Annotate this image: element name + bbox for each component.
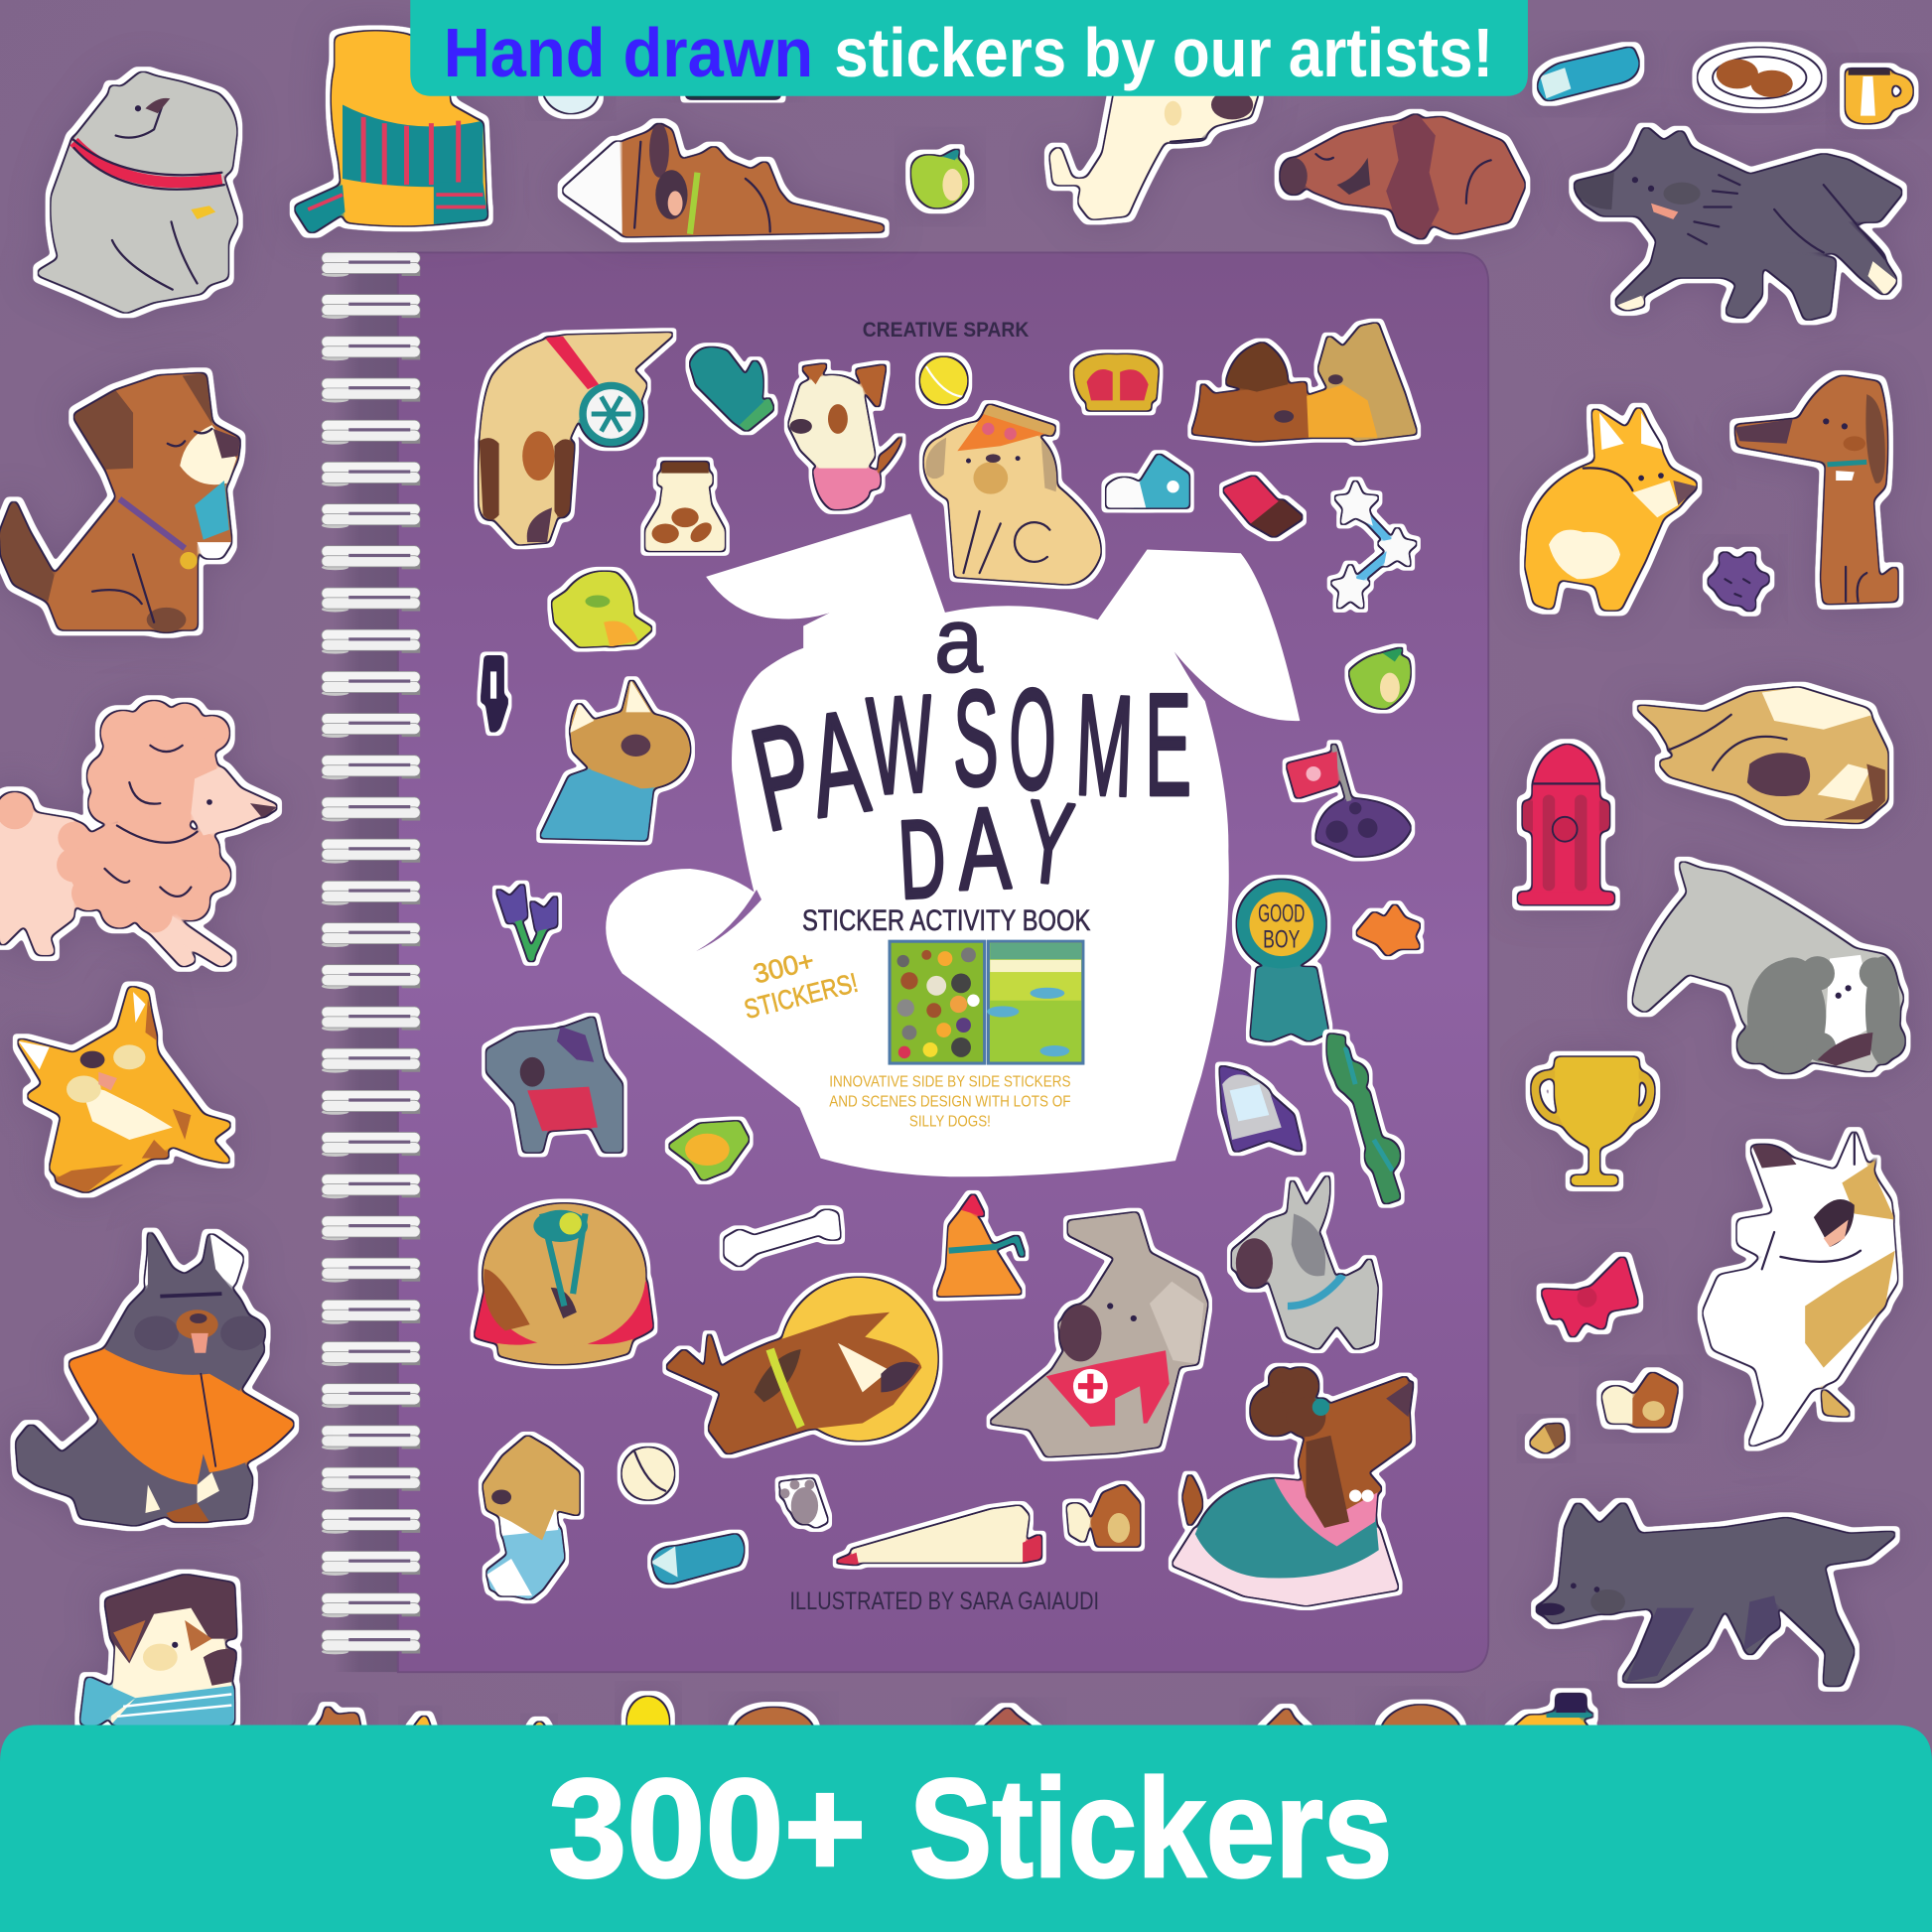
stickers peeking above the bottom band bbox=[308, 1694, 1596, 1769]
sticker peek: brown bbox=[308, 1703, 362, 1737]
sticker: paw print bbox=[778, 1478, 828, 1528]
illustrator credit: ILLUSTRATED BY SARA GAIAUDI bbox=[790, 1588, 1099, 1615]
bottom headline: Stickers bbox=[909, 1749, 1392, 1906]
sticker peek: dog with top hat bbox=[1503, 1694, 1596, 1737]
title: a PAWSOME DAY: O bbox=[1009, 660, 1056, 820]
sticker: white dog with tan patches bbox=[1703, 1128, 1897, 1448]
sticker: rocket bbox=[1220, 1066, 1303, 1152]
title: a PAWSOME DAY: M bbox=[1073, 665, 1136, 826]
sticker: gray dog with collar bbox=[1232, 1173, 1378, 1349]
title: a PAWSOME DAY bbox=[740, 589, 1191, 922]
callout: 300+ stickers: 300+ bbox=[750, 944, 817, 990]
sticker: apple bbox=[1349, 647, 1410, 709]
title: a PAWSOME DAY: D bbox=[896, 796, 948, 922]
top banner bbox=[410, 0, 1528, 96]
description: SILLY DOGS! bbox=[909, 1113, 991, 1130]
sticker: gray fluffy dog bbox=[1632, 860, 1905, 1073]
description: AND SCENES DESIGN WITH LOTS OF bbox=[829, 1093, 1070, 1110]
white dog silhouette on the cover bbox=[606, 514, 1300, 1176]
sticker: cream dog bbox=[1049, 88, 1259, 219]
sticker: oven mitt bbox=[690, 347, 773, 431]
bottom band bbox=[0, 1725, 1932, 1932]
sticker: gray dog with red vest bbox=[988, 1212, 1207, 1456]
panel: spiral notebook cover bbox=[322, 252, 1488, 1672]
sticker: chocolate bar bbox=[1222, 476, 1304, 537]
sticker: tulips bbox=[495, 883, 557, 961]
sticker: dog in mug bbox=[788, 363, 905, 509]
sticker: jack russell with scarf bbox=[80, 1575, 236, 1725]
title: a PAWSOME DAY: Y bbox=[1020, 776, 1079, 909]
nose cut line bbox=[696, 890, 761, 951]
sticker: sleeping tan dog bbox=[1632, 688, 1887, 823]
sticker: turtle bbox=[668, 1121, 750, 1180]
sticker: crown bbox=[1074, 354, 1159, 410]
sticker: green duck toy bbox=[552, 572, 653, 647]
sticker: gray bulldog bbox=[35, 71, 238, 313]
sticker peek: football bbox=[733, 1708, 814, 1762]
sticker: dog in dress bbox=[1172, 1368, 1414, 1605]
sticker: dog in basket bbox=[475, 1204, 653, 1364]
sticker: pug with pizza bbox=[924, 404, 1100, 584]
sticker: squirrel bbox=[1067, 1484, 1140, 1547]
sticker peek: brown ball bbox=[1380, 1706, 1461, 1769]
sticker: corgi from behind bbox=[1525, 404, 1698, 610]
sticker: goose bbox=[832, 1506, 1041, 1565]
sticker peek: red-brown bbox=[973, 1707, 1044, 1737]
sticker peek: small bbox=[527, 1719, 551, 1737]
sticker: dog in cone bbox=[561, 123, 885, 236]
sticker: yellow dog with scarf bbox=[293, 32, 487, 234]
description bbox=[829, 1074, 1070, 1130]
sticker: black bulldog with orange cape bbox=[16, 1226, 296, 1525]
sticker: dog with wheel bbox=[479, 333, 675, 545]
sticker: pink poodle bbox=[0, 701, 281, 967]
sticker: red bow bbox=[1540, 1254, 1639, 1340]
title: a PAWSOME DAY: P bbox=[740, 693, 827, 863]
sticker: chicken bbox=[936, 1192, 1023, 1297]
sticker: tennis ball bbox=[920, 357, 967, 404]
sticker: gray wolf bbox=[1535, 1501, 1900, 1686]
sticker: purple ball bbox=[1708, 552, 1769, 612]
sticker: corgi in blanket bbox=[540, 678, 690, 840]
sticker: flag on rock bbox=[1287, 745, 1411, 857]
sticker: marker bbox=[650, 1534, 744, 1584]
sticker peek: brown ear bbox=[1257, 1707, 1313, 1737]
sticker: dog in helmet bbox=[665, 1278, 937, 1453]
sticker: good boy rosette: BOY bbox=[1263, 926, 1300, 953]
sticker: squirrel (right) bbox=[1601, 1371, 1678, 1427]
publisher: CREATIVE SPARK bbox=[863, 319, 1030, 342]
sticker: bone bbox=[725, 1210, 840, 1267]
description: INNOVATIVE SIDE BY SIDE STICKERS bbox=[829, 1074, 1070, 1091]
sticker: sleeping brown spaniel bbox=[1280, 113, 1525, 240]
title: a PAWSOME DAY: A bbox=[800, 681, 877, 849]
banner headline: stickers by our artists! bbox=[834, 14, 1493, 91]
callout: 300+ stickers: STICKERS! bbox=[741, 967, 861, 1025]
title: a PAWSOME DAY: a bbox=[934, 589, 983, 691]
thumbnail: sticker sheet bbox=[890, 941, 985, 1063]
sticker: teal marker bbox=[1538, 47, 1639, 101]
subtitle: STICKER ACTIVITY BOOK bbox=[802, 904, 1090, 937]
sticker peek: yellow bbox=[407, 1713, 434, 1737]
sticker: acorn bbox=[1528, 1423, 1565, 1453]
title: a PAWSOME DAY: S bbox=[953, 662, 999, 814]
sticker: good boy rosette bbox=[1237, 880, 1328, 1041]
sticker: fire hydrant bbox=[1518, 745, 1614, 904]
sticker: mug bbox=[1846, 69, 1913, 123]
sticker: dark wolf top bbox=[1574, 126, 1903, 321]
sticker: cookie jar bbox=[645, 462, 725, 551]
sticker: good boy rosette: GOOD bbox=[1258, 900, 1305, 927]
title: a PAWSOME DAY: W bbox=[864, 667, 937, 824]
sticker: dog in sock bbox=[483, 1436, 579, 1599]
sticker: plate of cookies bbox=[1698, 48, 1821, 107]
callout: 300+ stickers bbox=[734, 935, 861, 1025]
title: a PAWSOME DAY: A bbox=[956, 783, 1013, 915]
banner headline: Hand drawn bbox=[444, 14, 813, 91]
sticker: autumn leaf bbox=[1355, 903, 1421, 956]
spiral binding rings bbox=[322, 252, 420, 1654]
sticker: gold trophy bbox=[1535, 1057, 1651, 1185]
sticker: pen bbox=[482, 656, 507, 733]
sticker: sneaker bbox=[1106, 454, 1189, 507]
sticker: corgi rolling bbox=[15, 986, 234, 1192]
bottom headline: 300+ bbox=[548, 1749, 866, 1906]
sticker: pile of dogs bbox=[1191, 323, 1417, 441]
sticker: white tennis ball bbox=[622, 1448, 674, 1499]
title: a PAWSOME DAY: E bbox=[1145, 664, 1191, 826]
sticker: gray dog with bow bbox=[486, 1017, 622, 1152]
sticker: peek under banner, round bbox=[542, 88, 599, 113]
sticker: brown dog with sock bbox=[0, 373, 240, 632]
sticker: peek under banner, dark tile bbox=[686, 86, 780, 98]
sticker: long-nosed dachshund bbox=[1734, 376, 1897, 604]
sticker: star constellation bbox=[1333, 483, 1415, 607]
stickers on the cover bbox=[475, 323, 1421, 1605]
thumbnail: scene page bbox=[987, 941, 1083, 1063]
sticker: rope toy bbox=[1335, 1035, 1400, 1201]
sticker: green apple (top) bbox=[911, 145, 968, 207]
sticker peek: yellow ball bbox=[627, 1697, 669, 1748]
